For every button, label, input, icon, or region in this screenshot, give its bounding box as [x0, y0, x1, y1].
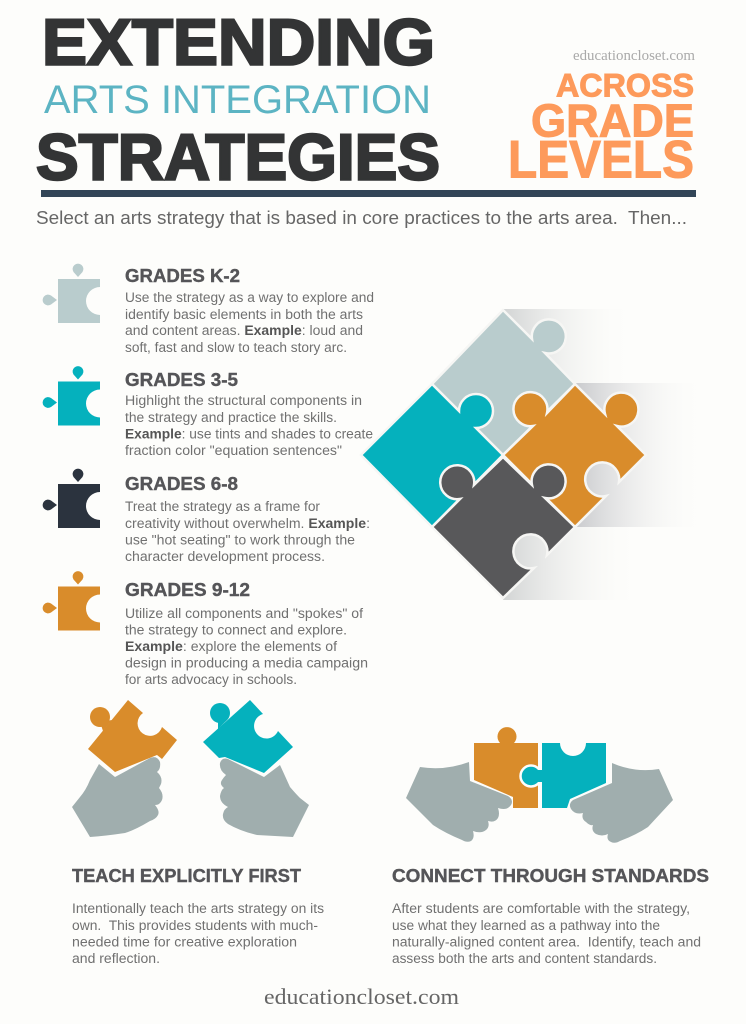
text: grades 9-12: the strategy to connect and explore. [125, 622, 347, 638]
panel: grades K-2 [43, 264, 374, 355]
piece: teal [361, 384, 503, 527]
text: grades K-2: soft, fast and slow to teach story arc. [125, 340, 347, 355]
text: grades 9-12: design in producing a media campaign [125, 656, 368, 670]
subtitle: across grade levels: GRADE [531, 94, 694, 146]
text: grades 3-5: fraction color "equation sentences" [125, 443, 342, 458]
title: STRATEGIES [36, 120, 440, 194]
text: grades 3-5: Example: use tints and shades to create [125, 426, 373, 442]
text: grades 9-12 [125, 606, 368, 687]
text block: naturally-aligned content area. Identify, teach and [392, 934, 701, 950]
subtitle: across grade levels: LEVELS [508, 130, 694, 190]
heading: grades 9-12: GRADES 9-12 [125, 580, 250, 600]
text block: After students are comfortable with the strategy, [392, 901, 690, 916]
panel: grades 3-5 [43, 366, 373, 458]
left hand [406, 762, 512, 842]
teal piece [520, 743, 606, 808]
icon: orange puzzle piece [43, 571, 100, 630]
icon: teal puzzle piece [43, 366, 100, 426]
panel: grades 6-8 [43, 469, 370, 564]
text block: assess both the arts and content standards. [392, 951, 657, 966]
panel: teach explicitly first [72, 866, 324, 966]
text: grades 6-8: use "hot seating" to work through the [125, 532, 355, 548]
text: grades 3-5 [125, 393, 373, 458]
text: grades 6-8: creativity without overwhelm. Example: [125, 516, 370, 531]
subtitle: across grade levels: ACROSS [556, 68, 694, 104]
website label top: educationcloset.com [573, 48, 696, 64]
text: grades 9-12: Utilize all components and "spokes" of [125, 606, 363, 621]
text: grades 6-8: Treat the strategy as a frame for [125, 499, 320, 514]
orange piece [88, 700, 177, 772]
heading: TEACH EXPLICITLY FIRST [72, 866, 301, 886]
illustration: hands holding separate pieces [72, 700, 309, 837]
intro text: Select an arts strategy that is based in core practices to the arts area. Then... [36, 208, 687, 228]
title: ARTS INTEGRATION [44, 78, 431, 122]
text block: Intentionally teach the arts strategy on its [72, 901, 324, 916]
right hand [570, 763, 673, 843]
title: EXTENDING [42, 6, 435, 78]
text: grades K-2: Use the strategy as a way to explore and [125, 290, 374, 305]
heading: grades 6-8: GRADES 6-8 [125, 474, 238, 494]
heading: grades 3-5: GRADES 3-5 [125, 370, 238, 390]
left hand [72, 757, 163, 837]
heading: grades K-2: GRADES K-2 [125, 266, 240, 286]
heading: CONNECT THROUGH STANDARDS [392, 866, 709, 886]
teal piece [203, 700, 293, 773]
text: grades K-2: identify basic elements in both the arts [125, 307, 363, 322]
text block: needed time for creative exploration [72, 934, 297, 950]
footer website: educationcloset.com [264, 984, 459, 1009]
shadow bands [503, 309, 705, 600]
piece: orange [503, 384, 646, 527]
text block: use what they learned as a pathway into the [392, 918, 660, 933]
text block: own. This provides students with much- [72, 918, 318, 933]
large puzzle diagram [361, 309, 705, 600]
header rule [41, 190, 696, 197]
icon: navy puzzle piece [43, 469, 100, 528]
text: grades 9-12: for arts advocacy in schools. [125, 672, 297, 687]
piece: dark grey [432, 457, 575, 598]
text block: and reflection. [72, 951, 160, 966]
piece: grey [432, 310, 575, 455]
text: grades 3-5: the strategy and practice the skills. [125, 410, 337, 425]
subtitle: across grade levels [508, 68, 694, 190]
text block [72, 901, 324, 966]
panel: grades 9-12 [43, 571, 368, 687]
text: grades 6-8: character development process. [125, 549, 325, 564]
text: grades 9-12: Example: explore the elements of [125, 639, 337, 654]
right hand [220, 758, 309, 837]
text block [392, 901, 701, 966]
title [36, 6, 440, 194]
illustration: hands joining pieces [406, 727, 673, 843]
icon: grey puzzle piece [43, 264, 100, 323]
panel: connect through standards [392, 866, 709, 966]
text: grades K-2: and content areas. Example: loud and [125, 323, 363, 338]
orange piece [474, 727, 538, 808]
text: grades 3-5: Highlight the structural components in [125, 393, 362, 408]
text: grades K-2 [125, 290, 374, 355]
text: grades 6-8 [125, 499, 370, 564]
